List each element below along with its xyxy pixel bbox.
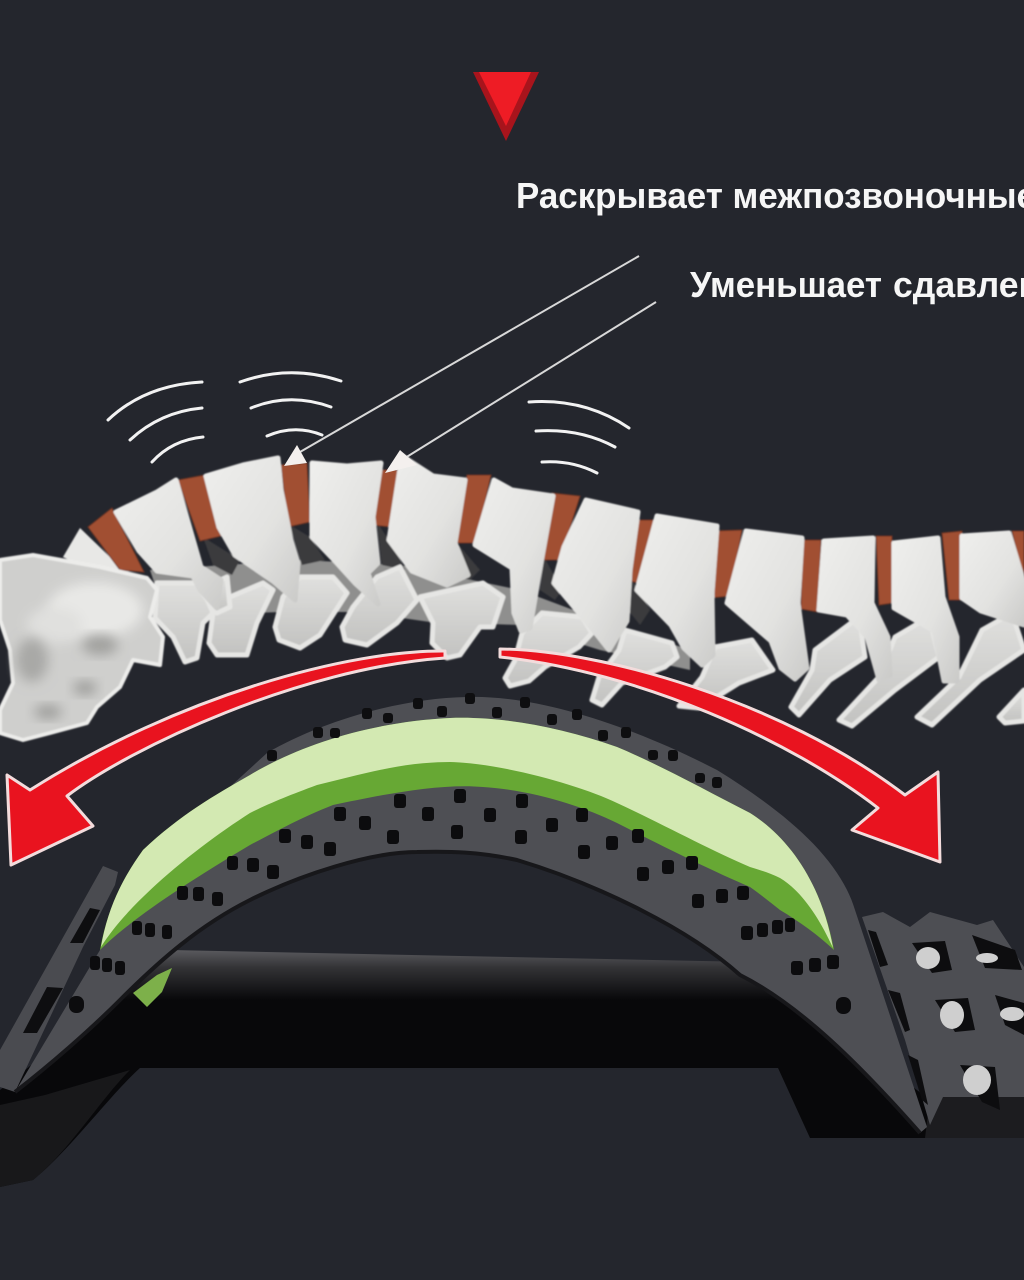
wing slots bbox=[912, 935, 1024, 1110]
processes bbox=[155, 567, 1024, 726]
motion waves centre bbox=[240, 373, 341, 436]
lower right base bbox=[925, 1095, 1024, 1138]
lower left base sheen bbox=[0, 1070, 130, 1187]
arch face bbox=[15, 697, 927, 1133]
right wing panel bbox=[862, 912, 1024, 1125]
discs bbox=[88, 463, 1024, 612]
left red arrow bbox=[7, 651, 445, 865]
black support base bbox=[0, 950, 1024, 1187]
pelvis bbox=[0, 555, 163, 740]
motion waves left bbox=[108, 382, 203, 462]
right red arrow bbox=[500, 649, 940, 862]
vertebra bodies bbox=[116, 456, 1024, 681]
wing slot highlights bbox=[916, 947, 1024, 1095]
spine illustration bbox=[0, 456, 1024, 740]
heading: reduces compression: Уменьшает bbox=[690, 264, 882, 305]
back stretcher device bbox=[0, 693, 1024, 1187]
arch underside rim bbox=[15, 852, 920, 1133]
shadow filler behind vertebrae bbox=[150, 560, 690, 670]
icon: red down triangle bbox=[473, 72, 539, 141]
green foam edge bbox=[100, 718, 834, 950]
pointer arrow to upper disc bbox=[284, 256, 639, 466]
sacrum top bbox=[63, 528, 137, 575]
left wing panel bbox=[0, 866, 118, 1092]
green foam top bbox=[101, 718, 833, 948]
green foam peek under arch bbox=[133, 968, 172, 1007]
shadows between vertebrae bbox=[203, 522, 650, 625]
wing notches bbox=[868, 930, 928, 1105]
massage spikes back row bbox=[267, 693, 722, 788]
motion waves right bbox=[529, 402, 629, 473]
massage spikes front rows bbox=[69, 789, 851, 1014]
pointer arrow to lower disc bbox=[385, 302, 656, 473]
